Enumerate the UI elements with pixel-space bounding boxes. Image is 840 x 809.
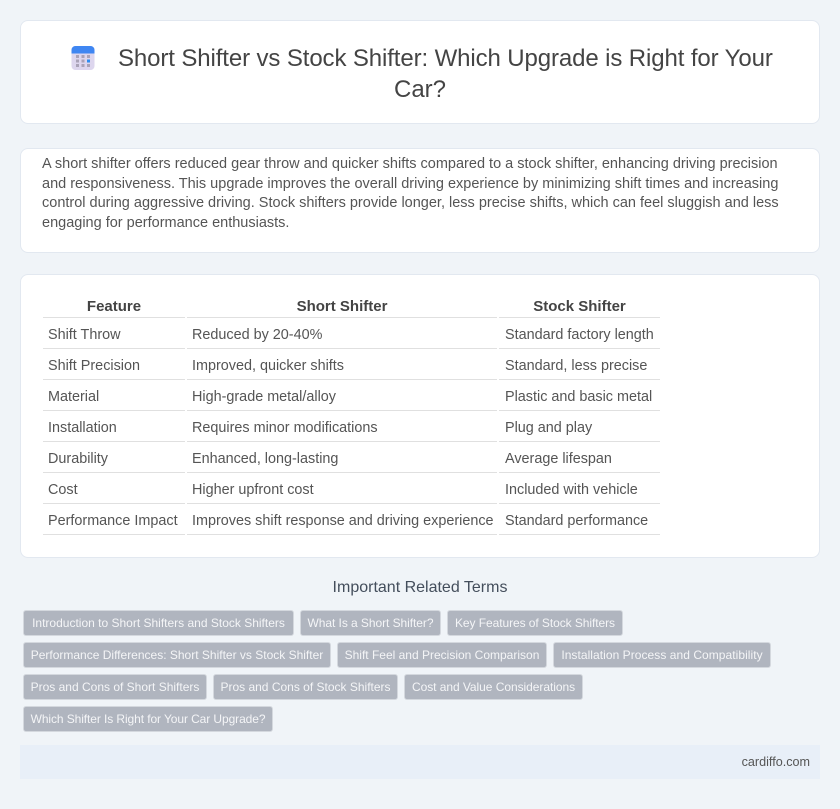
- related term tags: Introduction to Short Shifters and Stock Shifters: [32, 616, 285, 630]
- panel: comparison table: [20, 274, 820, 558]
- table row: shift precision: Shift Precision: [48, 358, 140, 374]
- table row: installation: [48, 420, 592, 436]
- table row: cost: Higher upfront cost: [192, 482, 314, 498]
- related term tags: Cost and Value Considerations: [412, 680, 575, 694]
- table row: performance impact: Standard performance: [505, 513, 648, 529]
- text block: introduction: and responsiveness. This upgrade improves the overall driving experience by minimizing shift times and increasing: [42, 176, 778, 192]
- table row: installation: Requires minor modifications: [192, 420, 378, 436]
- table row: cost: Included with vehicle: [505, 482, 638, 498]
- table row: durability: Enhanced, long-lasting: [192, 451, 338, 467]
- table header: [87, 298, 626, 315]
- panel: introduction: [20, 148, 820, 253]
- table row: shift throw: [48, 327, 654, 343]
- related term tags: Installation Process and Compatibility: [561, 648, 763, 662]
- table row: durability: Durability: [48, 451, 108, 467]
- table row: durability: [48, 451, 612, 467]
- table row: material: Material: [48, 389, 99, 405]
- related term tags: Shift Feel and Precision Comparison: [345, 648, 539, 662]
- text block: introduction: [42, 156, 779, 231]
- table row: shift throw: Reduced by 20-40%: [192, 327, 322, 343]
- table header: Short Shifter: [297, 298, 387, 315]
- footer: [20, 745, 820, 779]
- table row: shift precision: Improved, quicker shifts: [192, 358, 344, 374]
- table row: material: Plastic and basic metal: [505, 389, 652, 405]
- table row: performance impact: [48, 513, 648, 529]
- table row: installation: Installation: [48, 420, 117, 436]
- table row: installation: Plug and play: [505, 420, 592, 436]
- panel: title header: [20, 20, 820, 124]
- table row: material: [48, 389, 652, 405]
- related term tags: Pros and Cons of Stock Shifters: [220, 680, 391, 694]
- table row: durability: Average lifespan: [505, 451, 612, 467]
- text block: introduction: A short shifter offers reduced gear throw and quicker shifts compared to a stock shifter, enhancing driving precision: [42, 156, 778, 172]
- table row: performance impact: Performance Impact: [48, 513, 178, 529]
- table row: shift throw: Shift Throw: [48, 327, 121, 343]
- related term tags: Performance Differences: Short Shifter vs Stock Shifter: [31, 648, 323, 662]
- table row: material: High-grade metal/alloy: [192, 389, 336, 405]
- footer brand: cardiffo.com: [742, 755, 810, 769]
- related term tags: What Is a Short Shifter?: [308, 616, 433, 630]
- title: Car?: [394, 76, 446, 103]
- text block: introduction: engaging for performance enthusiasts.: [42, 215, 289, 231]
- heading: related terms: Important Related Terms: [333, 579, 507, 596]
- table row: shift precision: Standard, less precise: [505, 358, 647, 374]
- table row: performance impact: Improves shift response and driving experience: [192, 513, 494, 529]
- table row: shift throw: Standard factory length: [505, 327, 654, 343]
- text block: introduction: control during aggressive driving. Stock shifters provide longer, less precise shifts, which can feel sluggish and less: [42, 195, 779, 211]
- related term tags: Key Features of Stock Shifters: [455, 616, 615, 630]
- related term tags: Which Shifter Is Right for Your Car Upgrade?: [31, 712, 265, 726]
- table row: cost: [48, 482, 638, 498]
- title: Short Shifter vs Stock Shifter: Which Upgrade is Right for Your: [118, 45, 773, 72]
- table header: Feature: [87, 298, 141, 315]
- related term tags: [23, 610, 771, 732]
- related term tags: Pros and Cons of Short Shifters: [31, 680, 199, 694]
- title: [118, 45, 773, 103]
- icon: calendar: [72, 46, 94, 70]
- table row: cost: Cost: [48, 482, 78, 498]
- table header: Stock Shifter: [533, 298, 626, 315]
- table row: shift precision: [48, 358, 647, 374]
